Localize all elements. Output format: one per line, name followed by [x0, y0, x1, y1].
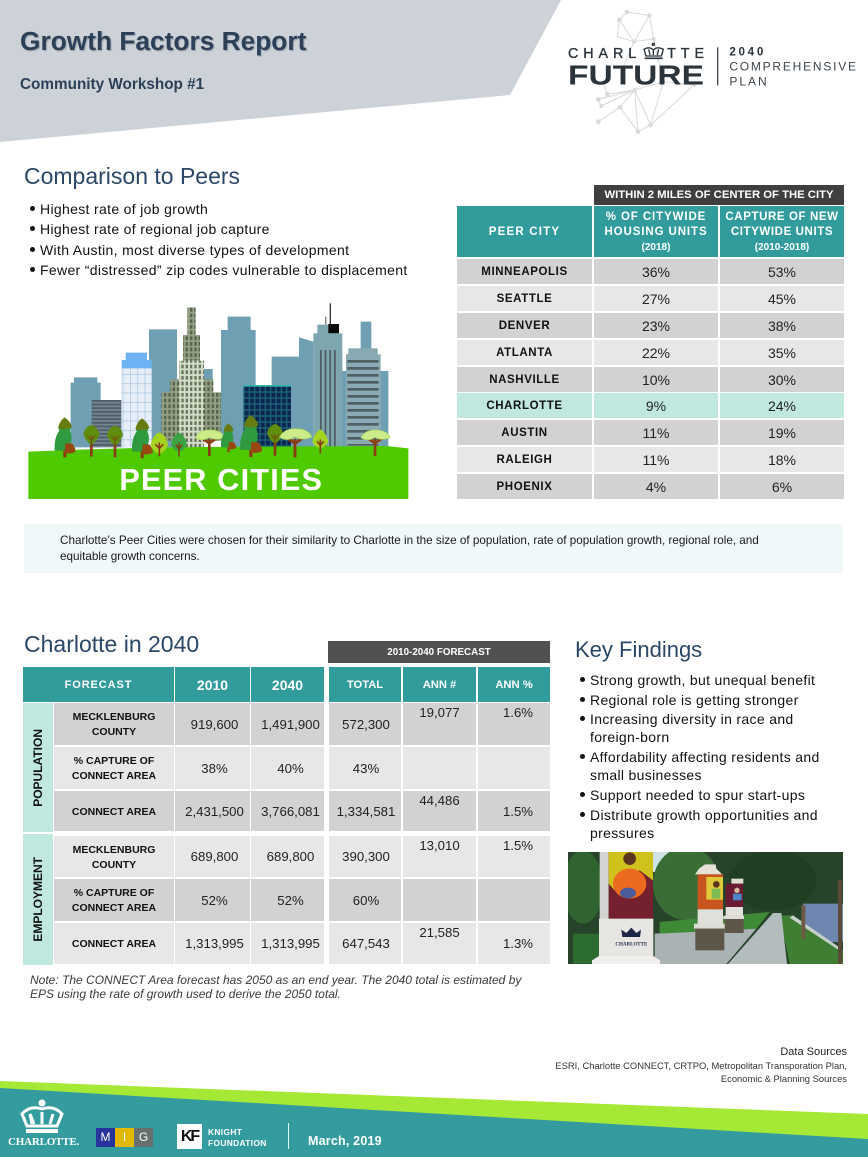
- row: population connect area: [54, 791, 550, 831]
- row: Austin: 19%: [768, 424, 796, 440]
- navy glass block: [243, 385, 291, 447]
- row: Seattle: 27%: [642, 290, 670, 306]
- table header: housing units: [594, 206, 718, 257]
- row: Atlanta: ATLANTA: [496, 346, 553, 358]
- logo: MIG: G: [139, 1130, 148, 1144]
- row: Phoenix: [457, 474, 844, 499]
- header: ann #: [403, 667, 476, 702]
- data sources text: ESRI, Charlotte CONNECT, CRTPO, Metropolitan Transporation Plan,: [555, 1060, 847, 1071]
- data sources text: [555, 1060, 847, 1084]
- table header: housing units: % OF CITYWIDE: [606, 211, 706, 223]
- row: employment connect area: 1,313,995: [261, 936, 320, 951]
- row: employment Mecklenburg: 689,800: [191, 849, 238, 864]
- header: ann #: ANN #: [423, 678, 456, 690]
- row: employment connect area: 1,313,995: [185, 936, 244, 951]
- bullet: Highest rate of job growth: [40, 201, 208, 217]
- photo: mosaic pillars on sidewalk: [568, 852, 843, 964]
- callout: peer cities note: [24, 524, 843, 573]
- table footnote: Note: The CONNECT Area forecast has 2050 as an end year. The 2040 total is estimated by: [30, 973, 521, 987]
- row: Nashville: NASHVILLE: [489, 374, 560, 386]
- row: population Mecklenburg: [54, 703, 550, 745]
- logo wordmark: Charlotte: CHARL TTE: [568, 46, 704, 62]
- header: 2040: [251, 667, 324, 702]
- row: Denver: 38%: [768, 318, 796, 334]
- table header: capture of units: [720, 206, 844, 257]
- table header: capture of units: (2010-2018): [755, 242, 809, 253]
- row: employment connect area: CONNECT AREA: [72, 938, 156, 950]
- row: employment Mecklenburg: [54, 836, 550, 877]
- heading: Charlotte in 2040: Charlotte in 2040: [24, 631, 199, 657]
- header: 2010: [175, 667, 250, 702]
- row: Atlanta: 35%: [768, 344, 796, 360]
- row: Austin: 11%: [642, 424, 669, 440]
- data sources: [555, 1046, 847, 1084]
- pillar 1: CHARLOTTE: [615, 942, 648, 947]
- green ground: [28, 446, 408, 499]
- row: Charlotte: CHARLOTTE: [486, 400, 563, 412]
- row: population connect area: 2,431,500: [185, 804, 244, 818]
- logo: Knight Foundation: [177, 1124, 267, 1149]
- row: population connect area: 3,766,081: [261, 804, 320, 818]
- logo wordmark: Future: FUTURE: [568, 59, 704, 90]
- row: Atlanta: 22%: [642, 344, 670, 360]
- row: Austin: [457, 420, 844, 445]
- row: Raleigh: 11%: [642, 452, 669, 468]
- bullet list: peers: [30, 201, 408, 278]
- table band: within 2 miles: [594, 185, 844, 205]
- finding: Increasing diversity in race and: [590, 711, 794, 727]
- wordmark: Charlotte: CHARLOTTE.: [8, 1136, 79, 1148]
- finding: [590, 748, 820, 784]
- finding: foreign-born: [590, 729, 669, 745]
- row: Nashville: 10%: [642, 372, 670, 388]
- row: Raleigh: 18%: [768, 452, 796, 468]
- title: Growth Factors Report: [20, 26, 306, 56]
- antenna tower: [313, 303, 342, 447]
- pillar 2: [694, 864, 726, 950]
- header: 2010: 2010: [197, 676, 228, 692]
- row: population Mecklenburg: 1,491,900: [261, 716, 320, 732]
- finding: Regional role is getting stronger: [590, 692, 799, 708]
- row: employment Mecklenburg: 390,300: [342, 849, 390, 864]
- table header: housing units: HOUSING UNITS: [604, 226, 708, 238]
- finding: Strong growth, but unequal benefit: [590, 672, 815, 688]
- row: Raleigh: RALEIGH: [497, 454, 552, 466]
- row: Charlotte: 9%: [646, 398, 666, 414]
- side label: employment: [23, 834, 53, 965]
- row: employment connect area: [54, 923, 550, 964]
- illustration: peer cities skyline: [28, 303, 408, 499]
- bullet: Highest rate of regional job capture: [40, 221, 270, 237]
- pillar 3: [723, 879, 744, 933]
- table band: within 2 miles: WITHIN 2 MILES OF CENTER OF THE CITY: [604, 189, 834, 201]
- header: total: TOTAL: [347, 678, 383, 690]
- row: Minneapolis: 53%: [768, 264, 796, 280]
- side label: employment: EMPLOYMENT: [31, 857, 45, 942]
- forecast table: [23, 641, 550, 965]
- icon: crown: [20, 1100, 64, 1133]
- callout: peer cities note: Charlotte’s Peer Cities were chosen for their similarity to Charlotte in the size of population, rate of population growth, regional role, and: [60, 534, 759, 547]
- table header: peer city: [457, 206, 592, 257]
- header: ann %: [478, 667, 550, 702]
- table header: capture of units: CITYWIDE UNITS: [731, 226, 833, 238]
- icon: KF mark: [177, 1124, 202, 1149]
- subtitle: Community Workshop #1: [20, 76, 204, 93]
- row: Denver: [457, 313, 844, 338]
- row: employment capture: 60%: [353, 892, 379, 908]
- finding: [590, 806, 818, 842]
- finding: [590, 710, 794, 746]
- row: employment Mecklenburg: 1.5%: [503, 838, 533, 853]
- striped tower: [346, 348, 381, 447]
- header: total: [329, 667, 401, 702]
- row: Seattle: [457, 286, 844, 311]
- row: Raleigh: [457, 447, 844, 472]
- header banner: [0, 0, 561, 142]
- row: Minneapolis: 36%: [642, 264, 670, 280]
- row: population Mecklenburg: MECKLENBURG: [73, 711, 155, 723]
- row: employment capture: 52%: [201, 892, 228, 908]
- table header: peer city: PEER CITY: [489, 226, 560, 238]
- olive art deco tower: [161, 307, 221, 447]
- callout: peer cities note: equitable growth concerns.: [60, 550, 200, 563]
- row: Seattle: SEATTLE: [497, 292, 552, 304]
- row: employment capture: [54, 879, 550, 921]
- row: Atlanta: [457, 340, 844, 365]
- row: employment connect area: 21,585: [419, 925, 460, 940]
- row: employment connect area: 1.3%: [503, 936, 533, 951]
- table header: capture of units: CAPTURE OF NEW: [725, 211, 839, 223]
- forecast table band: [328, 641, 550, 663]
- row: Seattle: 45%: [768, 290, 796, 306]
- heading: Comparison to Peers: Comparison to Peers: [24, 163, 240, 189]
- heading: Key Findings: Key Findings: [575, 637, 702, 662]
- glass tower: [121, 353, 152, 447]
- row: employment Mecklenburg: COUNTY: [92, 858, 136, 870]
- row: population connect area: 44,486: [419, 793, 460, 808]
- row: Nashville: [457, 367, 844, 392]
- side label: population: [23, 703, 53, 832]
- logo: Plan: PLAN: [729, 74, 767, 88]
- row: employment connect area: 647,543: [342, 936, 390, 951]
- row: Phoenix: 6%: [772, 478, 792, 494]
- pillar 1: [592, 852, 660, 964]
- logo: MIG: M: [100, 1130, 110, 1144]
- logo: 2040: 2040: [729, 46, 763, 59]
- logo: Charlotte Future 2040 Comprehensive Plan: [568, 10, 856, 134]
- row: population connect area: 1,334,581: [337, 804, 395, 818]
- row: Denver: DENVER: [499, 320, 550, 332]
- table: peer cities: [457, 185, 844, 499]
- data sources text: Economic & Planning Sources: [721, 1073, 847, 1084]
- row: Charlotte: 24%: [768, 398, 796, 414]
- header: forecast: FORECAST: [65, 678, 132, 690]
- row: Charlotte: [457, 393, 844, 418]
- row: population Mecklenburg: 919,600: [191, 716, 238, 732]
- side label: population: POPULATION: [31, 729, 45, 806]
- icon: KF mark: KF: [181, 1128, 198, 1145]
- row: employment Mecklenburg: 13,010: [419, 838, 460, 853]
- table footnote: [30, 973, 522, 1001]
- header: ann %: ANN %: [495, 678, 533, 690]
- row: employment capture: % CAPTURE OF: [74, 887, 154, 899]
- row: Minneapolis: MINNEAPOLIS: [481, 266, 568, 278]
- grey office block: [92, 400, 128, 447]
- row: population capture: [54, 747, 550, 789]
- data sources heading: Data Sources: [780, 1046, 847, 1058]
- row: employment capture: 52%: [277, 892, 304, 908]
- bullet: Fewer “distressed” zip codes vulnerable to displacement: [40, 262, 408, 278]
- Knight Foundation wordmark: KNIGHT: [208, 1127, 242, 1137]
- Knight Foundation wordmark: FOUNDATION: [208, 1138, 267, 1148]
- logo divider: [717, 47, 718, 85]
- logo network graphic: [596, 10, 696, 134]
- row: population Mecklenburg: COUNTY: [92, 726, 136, 738]
- icon: logo crown: [644, 43, 663, 58]
- logo: Charlotte crown: [8, 1100, 79, 1148]
- row: population connect area: CONNECT AREA: [72, 806, 156, 818]
- row: population capture: CONNECT AREA: [72, 770, 156, 782]
- logo: MIG: [96, 1128, 153, 1147]
- bullet: With Austin, most diverse types of development: [40, 242, 349, 258]
- footer band: [0, 1081, 868, 1157]
- logo: Comprehensive: COMPREHENSIVE: [729, 60, 856, 74]
- label: Peer Cities: PEER CITIES: [119, 463, 322, 497]
- row: population capture: 38%: [201, 760, 228, 776]
- row: Denver: 23%: [642, 318, 670, 334]
- finding: small businesses: [590, 767, 702, 783]
- row: Phoenix: 4%: [646, 478, 666, 494]
- header: forecast: [23, 667, 174, 702]
- row: Austin: AUSTIN: [501, 426, 548, 438]
- logo: MIG: I: [123, 1130, 126, 1144]
- header: 2040: 2040: [272, 676, 303, 692]
- forecast table band: 2010-2040 FORECAST: [387, 646, 491, 658]
- row: population capture: % CAPTURE OF: [74, 755, 154, 767]
- row: population connect area: 1.5%: [503, 804, 533, 818]
- finding: Support needed to spur start-ups: [590, 787, 805, 803]
- row: population Mecklenburg: 19,077: [419, 705, 460, 720]
- row: Minneapolis: [457, 259, 844, 284]
- row: Phoenix: PHOENIX: [497, 480, 552, 492]
- row: population capture: 43%: [353, 760, 379, 776]
- finding: Distribute growth opportunities and: [590, 807, 818, 823]
- trees: [55, 415, 390, 458]
- row: population capture: 40%: [277, 760, 304, 776]
- row: population Mecklenburg: 572,300: [342, 716, 390, 732]
- background blue towers: [71, 317, 388, 447]
- footer divider: [288, 1123, 289, 1149]
- row: employment Mecklenburg: MECKLENBURG: [73, 844, 155, 856]
- row: employment Mecklenburg: 689,800: [267, 849, 314, 864]
- table footnote: EPS using the rate of growth used to derive the 2050 total.: [30, 987, 341, 1001]
- bullet list: key findings: [580, 672, 820, 841]
- footer date: March, 2019: [308, 1134, 382, 1148]
- row: Nashville: 30%: [768, 372, 796, 388]
- finding: Affordability affecting residents and: [590, 749, 820, 765]
- row: population Mecklenburg: 1.6%: [503, 705, 533, 720]
- table header: housing units: (2018): [642, 242, 670, 253]
- Knight Foundation wordmark: [208, 1127, 267, 1148]
- row: employment capture: CONNECT AREA: [72, 902, 156, 914]
- finding: pressures: [590, 825, 654, 841]
